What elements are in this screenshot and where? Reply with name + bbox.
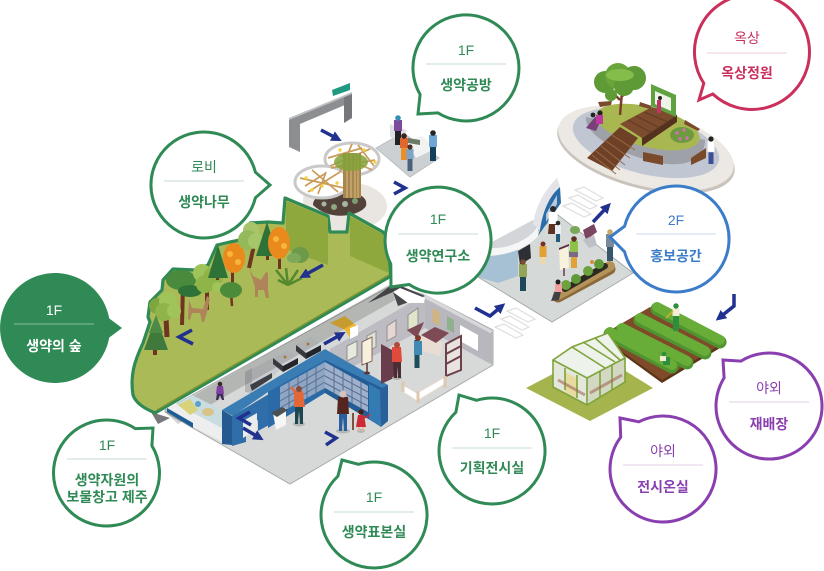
- fern: [276, 268, 302, 285]
- ground: [132, 198, 391, 413]
- chevron: forest exit: [179, 330, 193, 344]
- chevron: to second floor: [394, 182, 405, 194]
- callout: medicine laboratory: 생약연구소: [406, 248, 470, 264]
- farmer watering: [666, 303, 680, 331]
- back wall with framed pictures: [330, 295, 425, 378]
- planter: [558, 259, 610, 297]
- floor: [165, 285, 493, 484]
- callout: specimen room: [321, 460, 427, 568]
- kiosk: [271, 407, 288, 430]
- callout: medicine resource treasury: [53, 420, 159, 526]
- blue storage shelf: [222, 349, 388, 446]
- callout: special exhibition room: 1F: [484, 425, 500, 441]
- visitor at shelf: [291, 386, 305, 426]
- shadow under forest platform: [165, 283, 395, 424]
- illustration: lobby medicine tree: [295, 143, 387, 230]
- illustration: medicine forest platform: [132, 198, 391, 424]
- tree: pine back: [208, 245, 228, 280]
- steps: to second floor: [495, 187, 603, 338]
- callout: medicine tree: 생약나무: [178, 194, 230, 210]
- tree: pine left: [144, 315, 168, 355]
- seated couple: [586, 110, 603, 131]
- arrow: to second floor: [475, 306, 502, 316]
- illustration: first floor exhibition hall: [165, 283, 493, 484]
- display panel: [381, 344, 394, 384]
- info kiosk: [583, 224, 597, 240]
- arrow: to rooftop: [593, 206, 608, 222]
- right wall: [424, 294, 493, 365]
- callout: outdoor greenhouse: 야외: [650, 443, 676, 459]
- arrow: gate to tree: [321, 130, 338, 139]
- callout: outdoor greenhouse: [610, 416, 716, 522]
- callout: specimen room: 생약표본실: [342, 524, 406, 540]
- dark portal: [368, 283, 425, 306]
- callout: rooftop garden: 옥상: [734, 30, 760, 46]
- callout: promotion space: 2F: [668, 212, 684, 228]
- arrow: under door: [243, 428, 260, 438]
- bush: [287, 247, 309, 263]
- poster stand: [362, 337, 372, 374]
- callout: rooftop garden: [694, 0, 809, 109]
- tree: light green center: [193, 264, 223, 310]
- callout: medicine forest: 생약의 숲: [26, 338, 82, 354]
- display cases: [273, 337, 321, 372]
- callout: medicine laboratory: 1F: [430, 211, 446, 227]
- illustration: second floor promotion space: [478, 178, 633, 322]
- guide person: [392, 342, 402, 380]
- callout: outdoor cultivation field: 야외: [756, 380, 782, 396]
- deer left: [188, 296, 210, 322]
- seated girl: [551, 280, 562, 301]
- illustration: medicine workshop: [376, 115, 439, 177]
- callout: medicine tree: [151, 132, 270, 238]
- elderly visitor: [336, 390, 353, 434]
- poster stand: [559, 244, 569, 276]
- callout: medicine workshop: 1F: [458, 42, 474, 58]
- chevron: floor: [325, 432, 336, 445]
- tree: light green left: [149, 292, 181, 337]
- callout: medicine resource treasury: 1F: [99, 437, 115, 453]
- callout: specimen room: 1F: [366, 489, 382, 505]
- tree: dark canopy: [166, 270, 202, 325]
- deer right: [249, 268, 269, 298]
- tree: light green back: [238, 222, 264, 268]
- chevron: door: [239, 412, 251, 425]
- callout: outdoor cultivation field: [716, 353, 822, 459]
- callout: outdoor greenhouse: 전시온실: [637, 479, 689, 495]
- callout: medicine resource treasury: 보물창고 제주: [66, 489, 148, 505]
- brochure rack: [446, 336, 461, 376]
- platform shadow: [151, 412, 170, 424]
- callout: medicine workshop: 생약공방: [440, 77, 492, 93]
- child visitor: [356, 409, 370, 433]
- illustration: lobby gate: [289, 83, 352, 152]
- arrow: to farm: [719, 294, 734, 318]
- wall right: [350, 216, 389, 273]
- callout: medicine laboratory: [385, 187, 491, 293]
- tree: pine back right: [256, 222, 278, 260]
- green photo frame: [651, 84, 676, 117]
- wall left: [286, 201, 328, 265]
- visitors: [548, 206, 558, 234]
- visitor child: [216, 382, 224, 400]
- callout: medicine tree: 로비: [191, 159, 217, 175]
- rope barrier: [403, 376, 445, 403]
- information desk and visitor: [407, 322, 449, 368]
- arrow: corridor: [324, 334, 342, 344]
- arrow: forest entry: [303, 265, 323, 276]
- tree: orange right: [268, 227, 290, 269]
- callout: rooftop garden: 옥상정원: [721, 65, 773, 81]
- callout: medicine resource treasury: 생약자원의: [75, 472, 139, 488]
- exhibition wall, left end: [167, 395, 222, 442]
- callout: promotion space: [610, 186, 729, 292]
- tree: [594, 63, 646, 115]
- tree: small round: [220, 282, 242, 306]
- illustration: outdoor greenhouse: [526, 333, 653, 421]
- illustration: outdoor cultivation field: [600, 303, 725, 383]
- tree: orange left: [223, 243, 245, 283]
- callout: promotion space: 홍보공간: [650, 248, 702, 264]
- callout: special exhibition room: [439, 395, 545, 504]
- callout: medicine workshop: [413, 15, 519, 121]
- farmer kneeling: [660, 352, 670, 365]
- callout: medicine forest: 1F: [46, 302, 62, 318]
- potted plant: [570, 226, 580, 234]
- corridor wall: [245, 358, 280, 398]
- callout: medicine forest: [0, 273, 122, 383]
- photographer: [708, 136, 714, 164]
- callout: outdoor cultivation field: 재배장: [750, 416, 788, 432]
- illustration: rooftop garden: [549, 63, 743, 210]
- yellow display wall: [330, 316, 358, 338]
- callout: special exhibition room: 기획전시실: [460, 460, 524, 476]
